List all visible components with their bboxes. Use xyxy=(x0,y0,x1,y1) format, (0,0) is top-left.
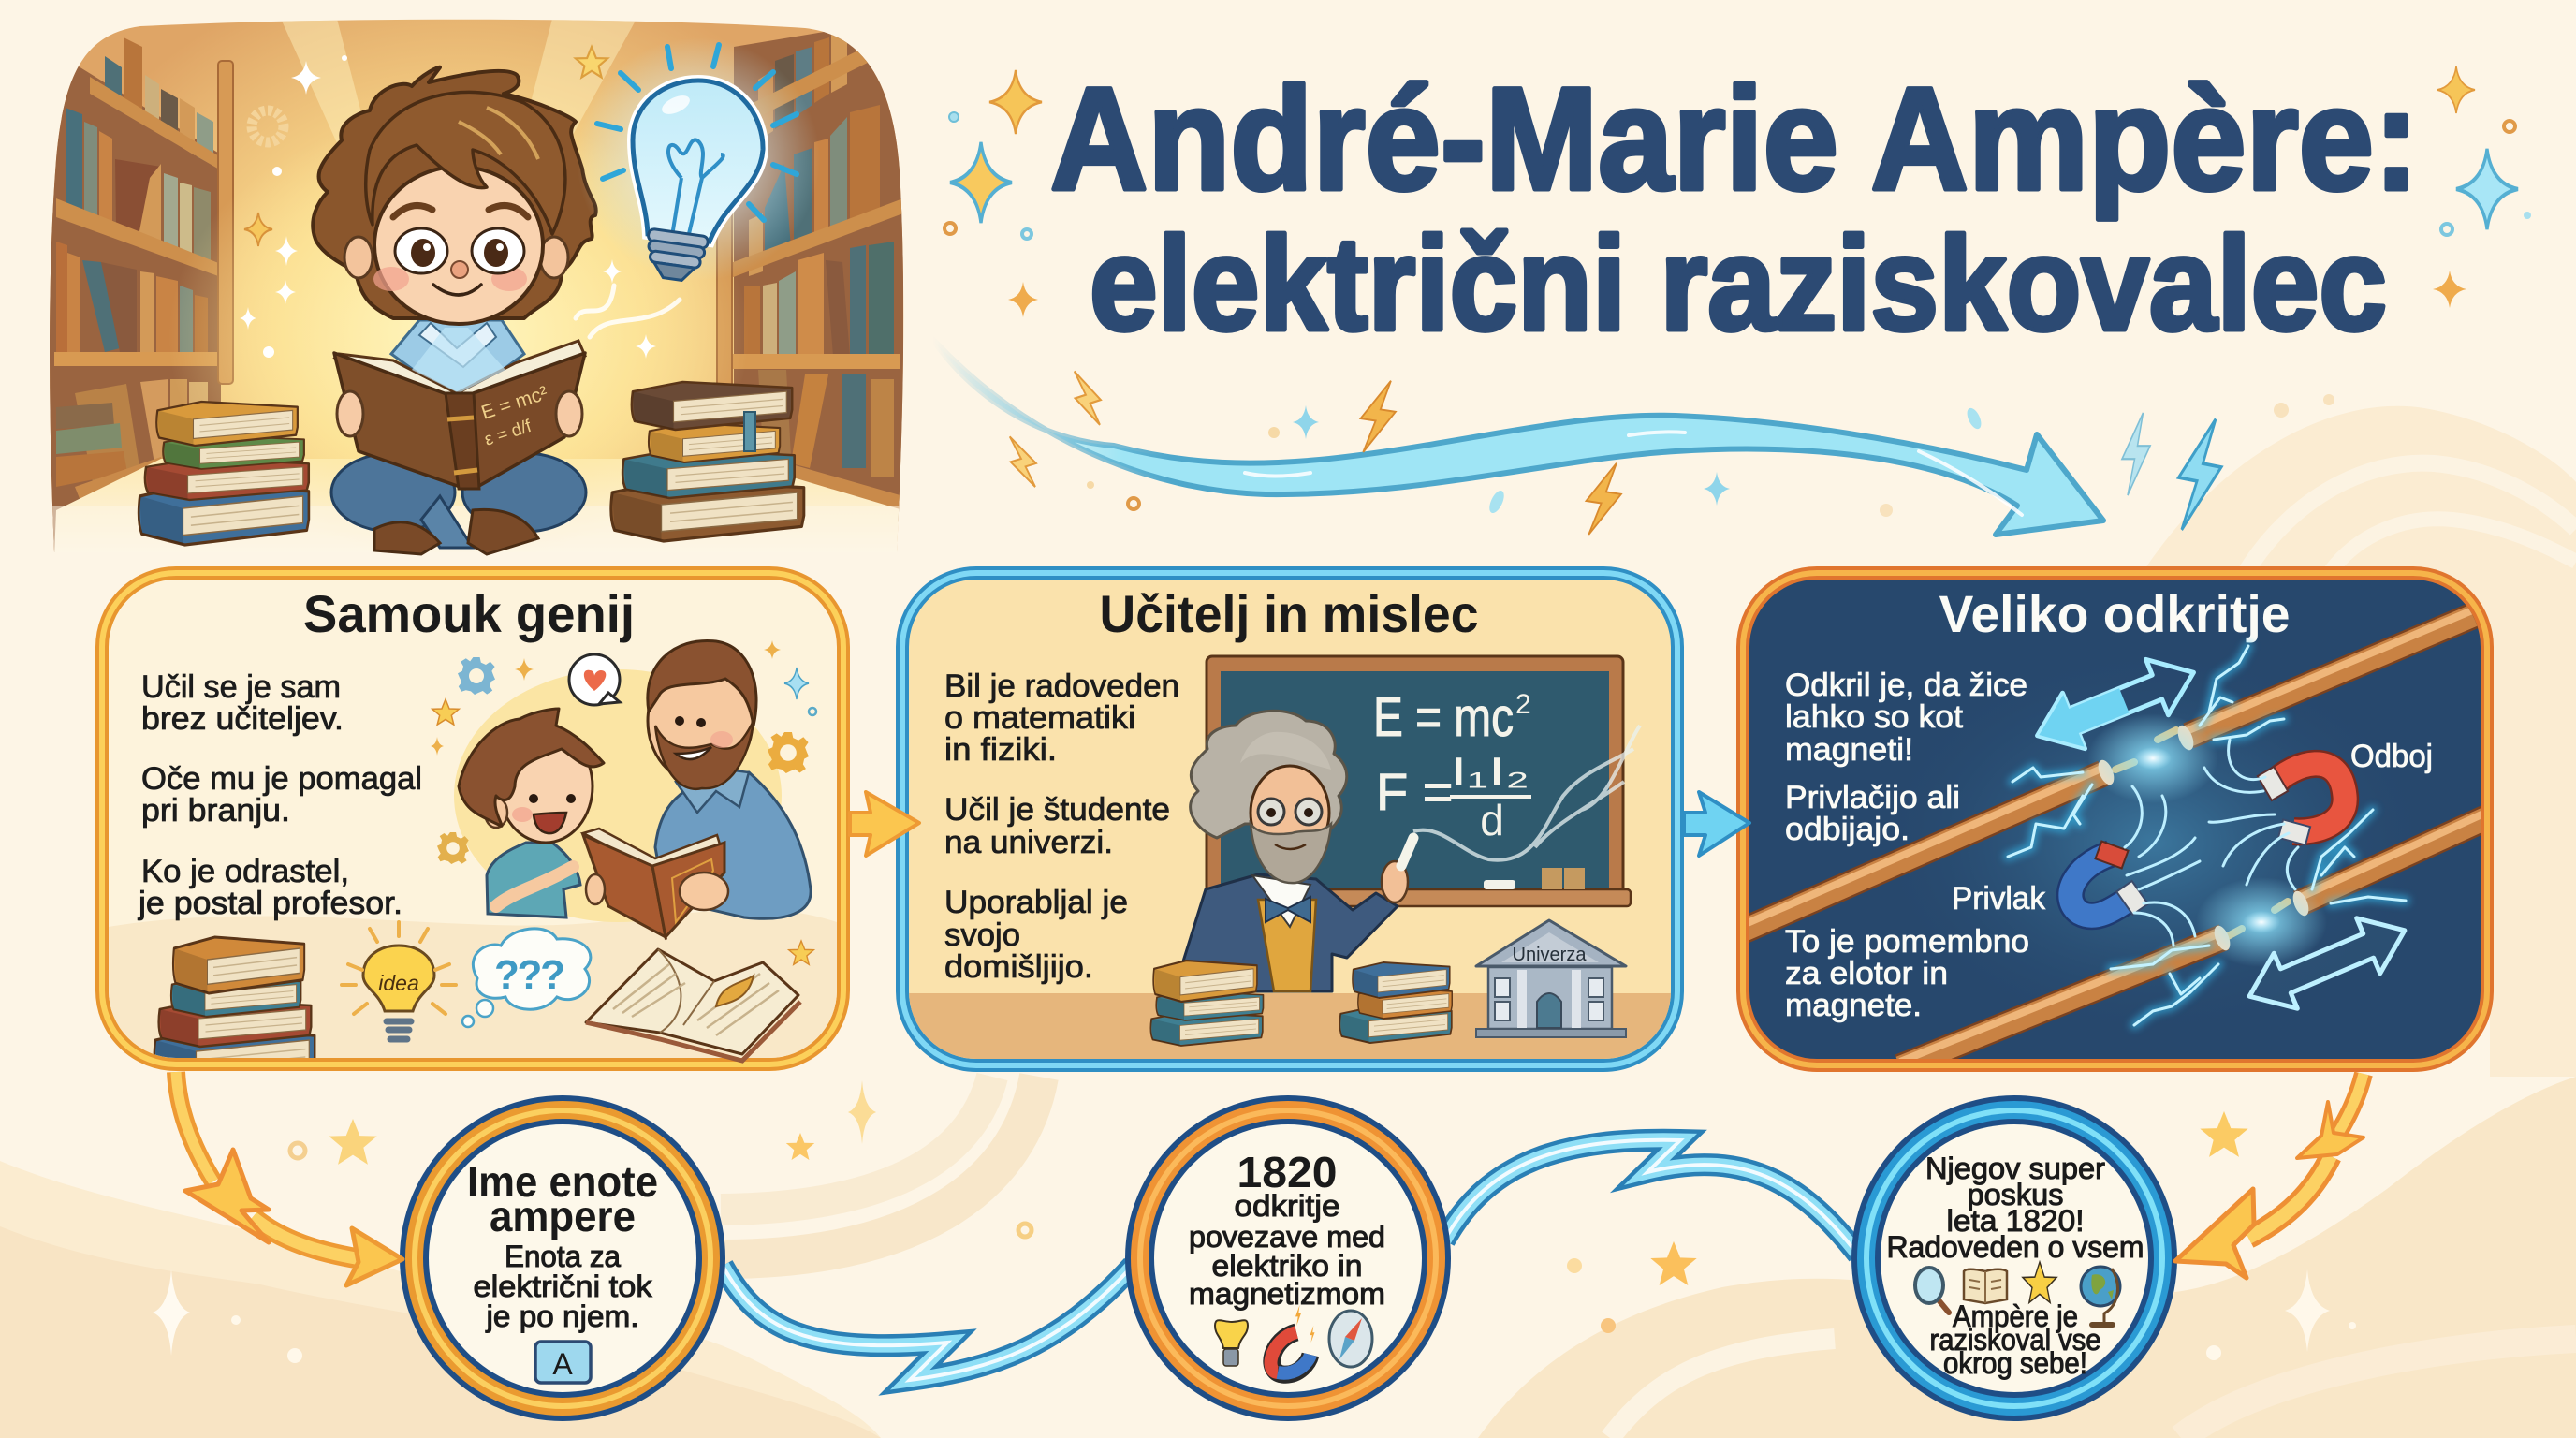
heading: Veliko odkritje xyxy=(1939,584,2290,643)
blue magnet xyxy=(2071,841,2148,916)
boy: legs and shoes xyxy=(331,453,586,554)
right bookcase xyxy=(734,19,903,524)
text block: in fiziki. xyxy=(944,732,1057,768)
book stack xyxy=(154,936,316,1058)
arrow: panel 1 to panel 2 xyxy=(850,792,919,856)
double arrow: wire current top xyxy=(2027,645,2204,763)
text block xyxy=(474,1240,653,1333)
icon: globe xyxy=(2081,1267,2120,1328)
icon: compass xyxy=(1329,1311,1372,1367)
book stacks xyxy=(1150,961,1452,1046)
circle: Njegov super poskus xyxy=(1852,1095,2177,1421)
sparkles near boy xyxy=(240,55,656,359)
text block: Bil je radoveden xyxy=(944,668,1179,704)
text block: povezave med xyxy=(1189,1220,1385,1254)
text block: magneti! xyxy=(1785,732,1913,768)
heading: 1820 xyxy=(1237,1148,1337,1196)
title: električni raziskovalec xyxy=(1090,210,2387,359)
book stack left xyxy=(139,402,309,545)
text block: Odkril je, da žice xyxy=(1785,668,2027,703)
text block: note: Ampère je xyxy=(1953,1299,2078,1333)
icon: A key: A xyxy=(552,1347,573,1381)
icon: horseshoe magnet xyxy=(1271,1305,1314,1374)
formulas: 2 xyxy=(1515,689,1531,720)
text block: električni tok xyxy=(474,1269,653,1303)
text block xyxy=(138,669,422,921)
university building xyxy=(1476,920,1626,1037)
text block: o matematiki xyxy=(944,700,1135,736)
text block: Učil se je sam xyxy=(141,669,341,705)
icon: open book with quill xyxy=(586,949,800,1061)
text block: elektriko in xyxy=(1211,1249,1363,1283)
arrow: circle 1 to circle 2 xyxy=(723,1266,1133,1380)
background swirls xyxy=(0,406,2576,1438)
book stack right xyxy=(611,382,804,541)
icon: heart speech bubble xyxy=(569,654,620,705)
text block: odbijajo. xyxy=(1785,812,1910,847)
text block: To je pomembno xyxy=(1785,924,2029,960)
icon: star xyxy=(2023,1262,2056,1302)
icon: light bulb xyxy=(576,37,820,337)
icon: bulb xyxy=(1215,1320,1248,1366)
bolts and sparkles around arrow xyxy=(1005,365,2334,538)
arrow: panel 2 to panel 3 xyxy=(1684,792,1749,856)
child xyxy=(459,709,604,917)
hero illustration: young Ampère reading in a library xyxy=(47,14,908,562)
heading: Samouk genij xyxy=(303,584,635,643)
formulas: F = xyxy=(1376,762,1453,821)
text block: Uporabljal je xyxy=(944,885,1128,920)
open book with formulas: E = mc² xyxy=(478,382,550,424)
text block: Ko je odrastel, xyxy=(141,854,349,889)
text block: heading: Njegov super xyxy=(1925,1152,2105,1185)
boy: face and ears xyxy=(344,167,568,324)
decorative stars bottom xyxy=(153,1080,2356,1363)
text block: domišljijo. xyxy=(944,949,1093,985)
text block xyxy=(1785,668,2029,1023)
university building: Univerza xyxy=(1513,945,1587,965)
text block: note: raziskoval vse xyxy=(1930,1323,2100,1357)
icon: thought cloud: ??? xyxy=(494,952,565,998)
sparks and lightning xyxy=(2008,646,2406,1025)
heading: Ime enote xyxy=(467,1157,658,1206)
icon: idea bulb: idea xyxy=(378,971,419,995)
circle: Ime enote ampere xyxy=(400,1095,725,1421)
panel: Učitelj in mislec xyxy=(902,573,1677,1065)
text block xyxy=(1189,1189,1385,1311)
text block: note xyxy=(1930,1299,2100,1380)
text block: na univerzi. xyxy=(944,825,1113,860)
icon: idea bulb xyxy=(342,922,456,1039)
arrow: circle 2 to circle 3 xyxy=(1444,1140,1858,1255)
small icons: gears and stars xyxy=(431,640,816,964)
arrow: panel 3 to circle 3 xyxy=(2175,1074,2364,1278)
open book held by father xyxy=(583,829,728,937)
boy: shirt xyxy=(391,320,524,403)
boy: fringe xyxy=(366,92,565,234)
copper wires xyxy=(1741,603,2490,1067)
text block: Učil je študente xyxy=(944,792,1170,828)
text block: svojo xyxy=(944,917,1020,953)
text block: heading xyxy=(1887,1152,2144,1264)
text block: pri branju. xyxy=(141,793,290,829)
text block: heading: poskus xyxy=(1968,1178,2063,1211)
text block: za elotor in xyxy=(1785,956,1948,991)
formulas: E = mc xyxy=(1373,687,1514,748)
formulas xyxy=(1373,687,1531,844)
double arrow: wire current bottom xyxy=(2238,902,2416,1024)
icon: book xyxy=(1964,1269,2007,1303)
text block: lahko so kot xyxy=(1785,699,1964,735)
left bookcase xyxy=(47,47,221,562)
hands xyxy=(337,391,582,436)
formulas: d xyxy=(1480,796,1504,844)
text block xyxy=(944,668,1179,985)
title xyxy=(1050,58,2419,359)
text block: heading: Radoveden o vsem xyxy=(1887,1230,2144,1264)
icon: thought cloud xyxy=(462,929,591,1027)
open book with formulas xyxy=(334,328,585,489)
panel: Veliko odkritje xyxy=(1741,573,2490,1067)
circle: Ime enote ampere: ampere xyxy=(490,1192,636,1240)
library background xyxy=(47,14,908,562)
icon: A key xyxy=(535,1342,591,1383)
magnetic field lines xyxy=(2125,740,2298,946)
red magnet xyxy=(2258,764,2345,845)
text block: note: okrog sebe! xyxy=(1943,1346,2087,1380)
panel: Samouk genij xyxy=(102,573,843,1085)
text block: brez učiteljev. xyxy=(141,701,344,737)
title: André-Marie Ampère: xyxy=(1050,58,2419,221)
text block: magnete. xyxy=(1785,988,1922,1023)
circle: 1820 xyxy=(1125,1095,1451,1421)
father xyxy=(648,640,811,918)
professor xyxy=(1174,711,1413,991)
text block: Enota za xyxy=(505,1240,621,1273)
label Odboj: Odboj xyxy=(2350,739,2433,774)
icon: magnifier xyxy=(1915,1268,1949,1313)
formulas: I₁I₂ xyxy=(1450,749,1530,793)
text block: Privlačijo ali xyxy=(1785,780,1960,815)
label Privlak: Privlak xyxy=(1952,881,2046,917)
chalk swoosh xyxy=(1413,726,1640,860)
title sparkles xyxy=(944,66,2531,317)
arrow: big blue arrow from hero to discovery xyxy=(932,339,2103,535)
heading: Učitelj in mislec xyxy=(1099,584,1479,643)
text block: heading: leta 1820! xyxy=(1947,1204,2084,1238)
text block: je po njem. xyxy=(485,1299,638,1333)
boy: hair back xyxy=(313,67,596,318)
text block: magnetizmom xyxy=(1189,1277,1385,1311)
open book with formulas: ε = d/f xyxy=(482,417,534,450)
blackboard xyxy=(1207,656,1640,906)
text block: odkritje xyxy=(1234,1189,1340,1223)
arrow: panel 1 to circle 1 xyxy=(176,1072,402,1285)
text block: Oče mu je pomagal xyxy=(141,761,422,797)
text block: je postal profesor. xyxy=(138,886,402,921)
